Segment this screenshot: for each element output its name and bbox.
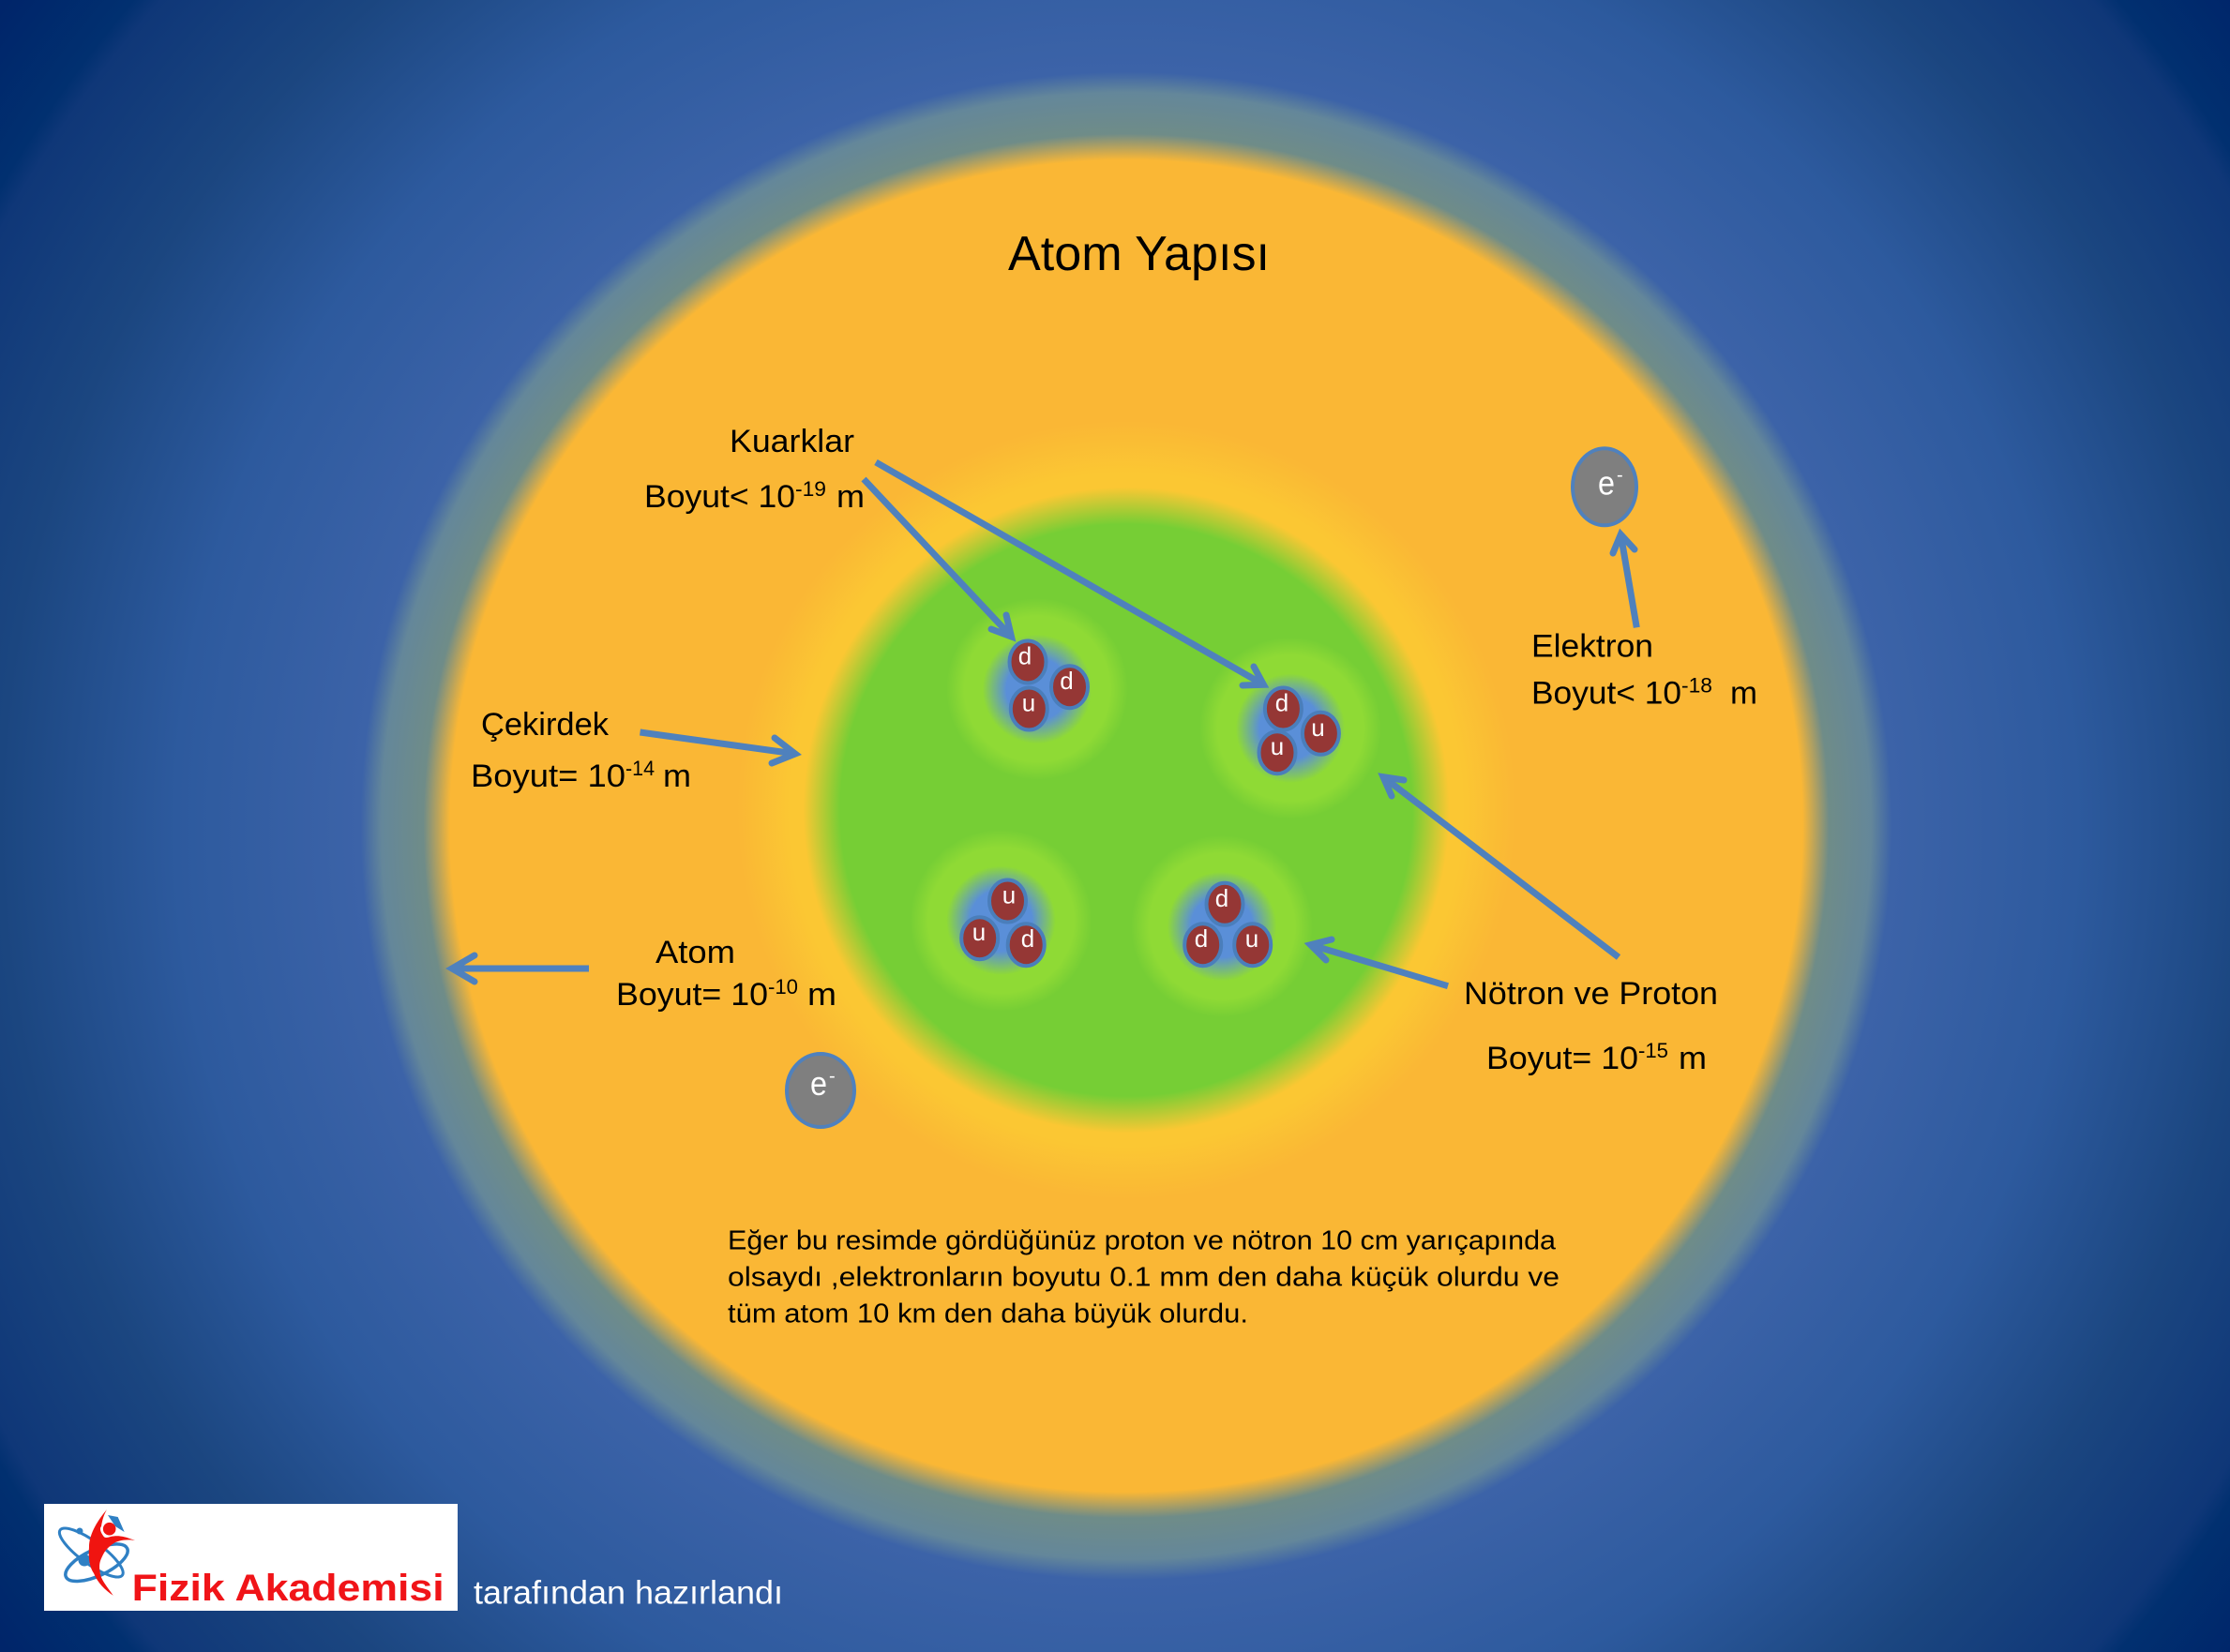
label: kuarklar: Kuarklar bbox=[730, 424, 854, 459]
arrow: elektron bbox=[1613, 534, 1636, 627]
nucleus core glow bbox=[737, 421, 1515, 1199]
electron: upper right bbox=[1573, 448, 1636, 525]
nucleon: bottom right: d bbox=[1215, 884, 1228, 912]
label: notron ve proton: Boyut= 10 bbox=[1486, 1041, 1638, 1076]
nucleon: top right bbox=[1199, 638, 1381, 819]
electron: upper right: e bbox=[1598, 463, 1615, 502]
arrow: kuarklar to top left nucleon bbox=[864, 479, 1011, 637]
electron: lower left: e bbox=[810, 1064, 827, 1103]
electron: lower left: - bbox=[829, 1066, 836, 1087]
icon: red figure bbox=[89, 1509, 135, 1596]
label: notron ve proton: -15 bbox=[1638, 1039, 1668, 1062]
electron: lower left bbox=[787, 1054, 854, 1127]
logo: Fizik Akademisi bbox=[44, 1504, 458, 1611]
label: elektron: Boyut< 10 bbox=[1531, 676, 1681, 712]
icon: atom orbits bbox=[53, 1515, 133, 1589]
label: kuarklar: -19 bbox=[795, 477, 826, 501]
electron: upper right: - bbox=[1617, 465, 1623, 486]
nucleon: bottom left: u bbox=[1002, 881, 1016, 909]
label: atom: m bbox=[807, 977, 836, 1013]
nucleon: bottom right: d bbox=[1195, 924, 1208, 953]
arrow: kuarklar to top right nucleon bbox=[876, 462, 1264, 685]
label: kuarklar: m bbox=[836, 479, 865, 515]
label: elektron: -18 bbox=[1681, 673, 1712, 698]
label: cekirdek: Çekirdek bbox=[481, 707, 610, 743]
logo wordmark: Fizik Akademisi bbox=[132, 1568, 444, 1609]
nucleon: top right: u bbox=[1271, 732, 1284, 760]
label: cekirdek: m bbox=[663, 758, 691, 794]
nucleon: top right: d bbox=[1275, 688, 1288, 716]
nucleon: bottom left: u bbox=[972, 918, 986, 946]
nucleon: top left bbox=[946, 598, 1128, 780]
label: cekirdek: Boyut= 10 bbox=[471, 758, 625, 794]
nucleon: top left: u bbox=[1022, 688, 1035, 716]
text block: explanation bbox=[728, 1226, 1559, 1329]
text block: explanation: olsaydı ,elektronların boyutu 0.1 mm den daha küçük olurdu ve bbox=[728, 1263, 1559, 1293]
nucleon: bottom right: u bbox=[1245, 924, 1258, 953]
nucleon: bottom left bbox=[910, 830, 1092, 1012]
title: Atom Yapısı bbox=[1008, 227, 1270, 281]
label: notron ve proton: m bbox=[1679, 1041, 1707, 1076]
nucleon: top right: u bbox=[1311, 713, 1325, 742]
credit text: tarafından hazırlandı bbox=[474, 1575, 783, 1612]
label: atom bbox=[616, 935, 836, 1013]
label: kuarklar bbox=[644, 424, 865, 515]
text block: explanation: Eğer bu resimde gördüğünüz proton ve nötron 10 cm yarıçapında bbox=[728, 1226, 1557, 1256]
text block: explanation: tüm atom 10 km den daha büyük olurdu. bbox=[728, 1299, 1248, 1329]
nucleon: top left: d bbox=[1060, 667, 1074, 695]
label: cekirdek: -14 bbox=[625, 757, 655, 780]
label: atom: -10 bbox=[768, 975, 798, 999]
nucleon: bottom left: d bbox=[1021, 924, 1034, 953]
label: notron ve proton bbox=[1464, 976, 1718, 1076]
arrow: atom boundary bbox=[452, 955, 589, 982]
label: atom: Boyut= 10 bbox=[616, 977, 768, 1013]
nucleon: bottom right bbox=[1131, 835, 1313, 1017]
label: notron ve proton: Nötron ve Proton bbox=[1464, 976, 1718, 1012]
label: kuarklar: Boyut< 10 bbox=[644, 479, 795, 515]
arrow: notron ve proton to nucleon bottom bbox=[1311, 939, 1448, 986]
label: elektron: Elektron bbox=[1531, 629, 1653, 665]
label: atom: Atom bbox=[655, 935, 735, 970]
label: elektron bbox=[1531, 629, 1757, 712]
label: cekirdek bbox=[471, 707, 691, 794]
label: elektron: m bbox=[1730, 676, 1757, 712]
arrow: notron ve proton to nucleon right bbox=[1383, 777, 1619, 957]
arrow: cekirdek to nucleus bbox=[640, 732, 795, 763]
nucleon: top left: d bbox=[1018, 641, 1032, 669]
